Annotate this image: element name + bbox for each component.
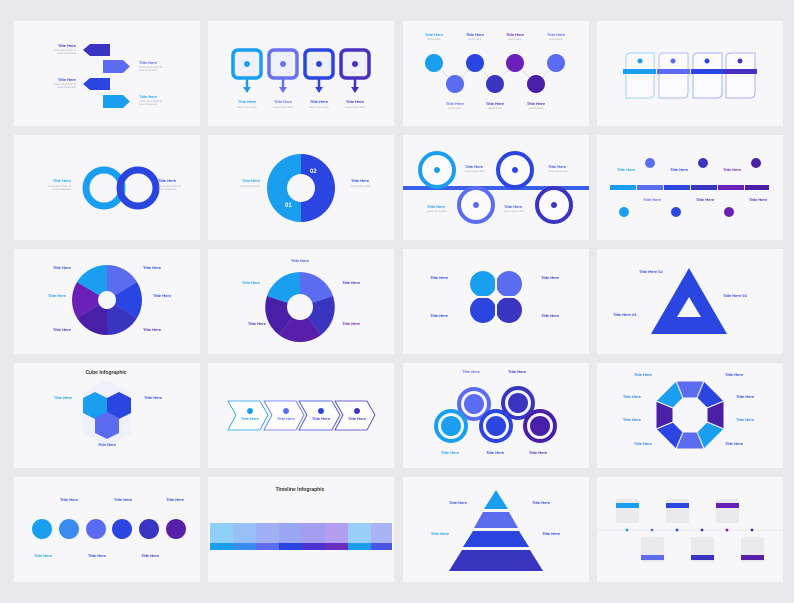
card 10: pentagon cycle: Title Here (248, 321, 267, 326)
card 17: circle row: Title Here (88, 553, 107, 558)
card 3: circle zigzag: Title Here (547, 32, 566, 37)
card 14: chevrons: Title Here (348, 416, 367, 421)
card 2: square callouts: Lorem ipsum dolor (273, 106, 293, 109)
card 17: circle row: Title Here (114, 497, 133, 502)
card 9: pinwheel: Title Here (53, 265, 72, 270)
card 17: circle row: Title Here (60, 497, 79, 502)
card 5: infinity rings: Title Here (158, 178, 177, 183)
card 16: octagon: Title Here (634, 372, 653, 377)
card 9: pinwheel: Title Here (153, 293, 172, 298)
text right: amet consectetur (139, 69, 158, 72)
card 5: infinity rings: Title Here (53, 178, 72, 183)
card 14: chevrons: Title Here (277, 416, 296, 421)
card 14: chevrons: Title Here (312, 416, 331, 421)
card 13: cube: Title Here (144, 395, 163, 400)
arrow 2 (103, 60, 130, 73)
card 2: square callouts: Title Here (310, 99, 329, 104)
card 19: pyramid (403, 477, 589, 582)
card 17: circle row: Title Here (166, 497, 185, 502)
card 18: timeline columns: Timeline Infographic (276, 487, 325, 493)
card 3: circle zigzag: Lorem ipsum (488, 107, 502, 110)
card 17: circle row: Title Here (34, 553, 53, 558)
card 5: infinity rings: amet consectetur (53, 188, 71, 191)
text left: amet consectetur (58, 86, 76, 89)
arrow 3 (83, 78, 110, 90)
card 16: octagon: Title Here (634, 441, 653, 446)
card 7: wave rings: Title Here (504, 204, 523, 209)
card 7: wave rings: Lorem ipsum dolor (548, 170, 568, 173)
card 6: donut (208, 135, 394, 240)
card 16: octagon: Title Here (736, 394, 755, 399)
card 12: triangle (597, 249, 783, 354)
card 3: circle zigzag: Title Here (446, 101, 465, 106)
card 8: arrow timeline: Title Here (696, 197, 715, 202)
card 2: square callouts: Title Here (238, 99, 257, 104)
card 13: cube (14, 363, 200, 468)
card 15: ring circles: Title Here (462, 369, 481, 374)
text right: Lorem ipsum dolor sit (139, 100, 162, 103)
card 9: pinwheel: Title Here (143, 327, 162, 332)
card 6: donut: Lorem ipsum dolor (351, 185, 371, 188)
card 10: pentagon cycle: Title Here (242, 280, 261, 285)
card 11: clover: Title Here (541, 313, 560, 318)
card 13: cube: Title Here (98, 442, 117, 447)
card 17: circle row: Title Here (141, 553, 160, 558)
card 6: donut: Title Here (351, 178, 370, 183)
text right (139, 60, 162, 106)
card 10: pentagon cycle: Title Here (342, 280, 361, 285)
card 4: tag banners (597, 21, 783, 126)
card 3: circle zigzag: Title Here (506, 32, 525, 37)
card 2: square callouts: Title Here (346, 99, 365, 104)
card 9: pinwheel: Title Here (48, 293, 67, 298)
text right: Lorem ipsum dolor sit (139, 66, 162, 69)
card 19: pyramid: Title Here (431, 531, 450, 536)
card 7: wave rings (403, 135, 589, 240)
card 5: infinity rings: amet consectetur (158, 188, 177, 191)
card 7: wave rings: Title Here (548, 164, 567, 169)
card 11: clover: Title Here (430, 275, 449, 280)
card 3: circle zigzag: Lorem ipsum (427, 38, 441, 41)
card 6: donut: 02 (310, 169, 317, 175)
card 15: ring circles (403, 363, 589, 468)
card 10: pentagon cycle (208, 249, 394, 354)
card 3: circle zigzag: Lorem ipsum (549, 38, 563, 41)
card 10: pentagon cycle: Title Here (342, 321, 361, 326)
card 9: pinwheel: Title Here (53, 327, 72, 332)
card 2: square callouts: Lorem ipsum dolor (237, 106, 257, 109)
card 3: circle zigzag: Lorem ipsum (448, 107, 462, 110)
card 20: card timeline (597, 477, 783, 582)
card 5: infinity rings (14, 135, 200, 240)
card 8: arrow timeline: Title Here (723, 167, 742, 172)
card 11: clover: Title Here (430, 313, 449, 318)
card 19: pyramid: Title Here (449, 500, 468, 505)
card 2: square callouts: Lorem ipsum dolor (345, 106, 365, 109)
card 13: cube: Cube Infographic (85, 370, 127, 376)
card 12: triangle: Title Here 01 (613, 312, 637, 317)
card 16: octagon (597, 363, 783, 468)
card 3: circle zigzag: Title Here (425, 32, 444, 37)
card 8: arrow timeline (597, 135, 783, 240)
text left: amet consectetur (58, 52, 76, 55)
card 19: pyramid: Title Here (542, 531, 561, 536)
card 8: arrow timeline: Title Here (643, 197, 662, 202)
card 8: arrow timeline: Title Here (617, 167, 636, 172)
card 15: ring circles: Title Here (529, 450, 548, 455)
card 10: pentagon cycle: Title Here (291, 258, 310, 263)
card 15: ring circles: Title Here (486, 450, 505, 455)
text right: amet consectetur (139, 103, 158, 106)
card 14: chevrons: Title Here (241, 416, 260, 421)
card 16: octagon: Title Here (623, 394, 642, 399)
card 6: donut: 01 (285, 203, 292, 209)
card 7: wave rings: Lorem ipsum dolor (465, 170, 485, 173)
text left: Lorem ipsum dolor sit (53, 49, 76, 52)
card 5: infinity rings: Lorem ipsum dolor sit (158, 185, 181, 188)
card 17: circle row (14, 477, 200, 582)
card 13: cube: Title Here (54, 395, 73, 400)
card 16: octagon: Title Here (725, 372, 744, 377)
card 16: octagon: Title Here (623, 417, 642, 422)
card 3: circle zigzag: Title Here (486, 101, 505, 106)
arrow 4 (103, 95, 130, 108)
card 8: arrow timeline: Title Here (749, 197, 768, 202)
card 6: donut: Lorem ipsum dolor (240, 185, 260, 188)
text left: Lorem ipsum dolor sit (53, 83, 76, 86)
card 7: wave rings: Lorem ipsum dolor (427, 210, 447, 213)
card 5: infinity rings: Lorem ipsum dolor sit (48, 185, 71, 188)
card 3: circle zigzag: Lorem ipsum (508, 38, 522, 41)
card 16: octagon: Title Here (736, 417, 755, 422)
card 18: timeline columns (208, 477, 394, 582)
card 16: octagon: Title Here (725, 441, 744, 446)
card 1: arrow steps (14, 21, 200, 126)
card 8: arrow timeline: Title Here (670, 167, 689, 172)
card 19: pyramid: Title Here (532, 500, 551, 505)
text right: Title Here (139, 94, 158, 99)
card 15: ring circles: Title Here (441, 450, 460, 455)
card 2: square callouts: Title Here (274, 99, 293, 104)
card 7: wave rings: Lorem ipsum dolor (504, 210, 524, 213)
card 6: donut: Title Here (242, 178, 261, 183)
card 11: clover: Title Here (541, 275, 560, 280)
card 15: ring circles: Title Here (508, 369, 527, 374)
text right: Title Here (139, 60, 158, 65)
card 9: pinwheel (14, 249, 200, 354)
card 3: circle zigzag: Title Here (527, 101, 546, 106)
card 3: circle zigzag: Lorem ipsum (529, 107, 543, 110)
text left (53, 43, 77, 89)
card 14: chevrons (208, 363, 394, 468)
card 3: circle zigzag (403, 21, 589, 126)
card 9: pinwheel: Title Here (143, 265, 162, 270)
card 2: square callouts: Lorem ipsum dolor (309, 106, 329, 109)
card 2: square callouts (208, 21, 394, 126)
arrow 1 (83, 44, 110, 56)
card 7: wave rings: Title Here (465, 164, 484, 169)
card 11: clover (403, 249, 589, 354)
card 7: wave rings: Title Here (427, 204, 446, 209)
card 12: triangle: Title Here 03 (723, 293, 747, 298)
card 12: triangle: Title Here 02 (639, 269, 663, 274)
card 3: circle zigzag: Lorem ipsum (468, 38, 482, 41)
text left: Title Here (58, 77, 77, 82)
text left: Title Here (58, 43, 77, 48)
card 3: circle zigzag: Title Here (466, 32, 485, 37)
